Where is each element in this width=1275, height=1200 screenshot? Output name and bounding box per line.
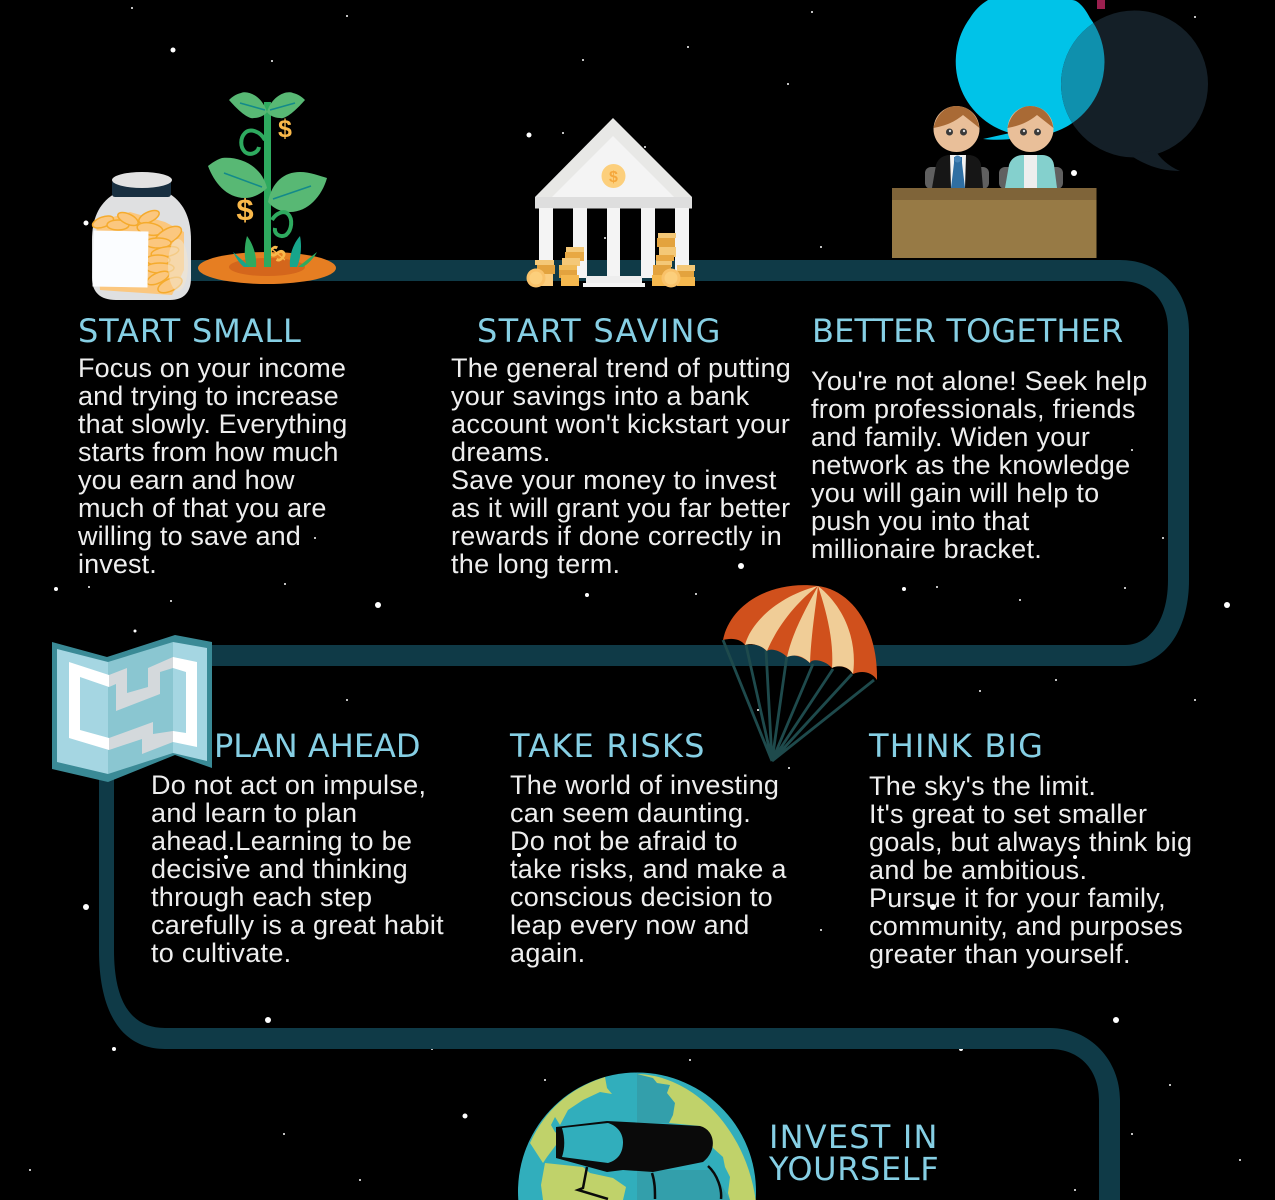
text: think big: It's great to set smaller bbox=[869, 799, 1147, 829]
heading: start small: START SMALL bbox=[78, 312, 302, 350]
heading: take risks: TAKE RISKS bbox=[510, 727, 706, 765]
text: start small: that slowly. Everything bbox=[78, 409, 347, 439]
text: think big: and be ambitious. bbox=[869, 855, 1087, 885]
heading: invest in yourself: INVEST IN bbox=[769, 1118, 939, 1156]
text: plan ahead: and learn to plan bbox=[151, 798, 357, 828]
icon: money plant: $ bbox=[236, 192, 254, 227]
text: start saving: rewards if done correctly in bbox=[451, 521, 782, 551]
text: better together: and family. Widen your bbox=[811, 422, 1090, 452]
icon: money plant: $ bbox=[263, 240, 293, 268]
heading: better together: BETTER TOGETHER bbox=[812, 312, 1123, 350]
text: plan ahead bbox=[151, 770, 444, 968]
icon: speech bubbles bbox=[956, 0, 1208, 171]
text: take risks: conscious decision to bbox=[510, 882, 773, 912]
text: take risks: leap every now and bbox=[510, 910, 750, 940]
heading: start saving: START SAVING bbox=[477, 312, 722, 350]
text: start small: invest. bbox=[78, 549, 157, 579]
text: start saving: The general trend of putting bbox=[451, 353, 791, 383]
text: take risks: again. bbox=[510, 938, 585, 968]
text: better together: from professionals, friends bbox=[811, 394, 1136, 424]
text: start saving: Save your money to invest bbox=[451, 465, 777, 495]
text: plan ahead: carefully is a great habit bbox=[151, 910, 444, 940]
text: plan ahead: to cultivate. bbox=[151, 938, 291, 968]
text: better together: push you into that bbox=[811, 506, 1030, 536]
text: start small bbox=[78, 353, 347, 579]
text: take risks: take risks, and make a bbox=[510, 854, 787, 884]
text: take risks: Do not be afraid to bbox=[510, 826, 738, 856]
heading: think big: THINK BIG bbox=[869, 727, 1044, 765]
text: start small: much of that you are bbox=[78, 493, 327, 523]
text: think big: community, and purposes bbox=[869, 911, 1183, 941]
icon: bank: $ bbox=[609, 169, 618, 186]
text: take risks: The world of investing bbox=[510, 770, 779, 800]
text: start saving: your savings into a bank bbox=[451, 381, 749, 411]
text: start saving: dreams. bbox=[451, 437, 551, 467]
text: start small: starts from how much bbox=[78, 437, 338, 467]
text: start small: willing to save and bbox=[78, 521, 301, 551]
text: start small: Focus on your income bbox=[78, 353, 346, 383]
text: plan ahead: ahead.Learning to be bbox=[151, 826, 412, 856]
text: start small: and trying to increase bbox=[78, 381, 339, 411]
text: start small: you earn and how bbox=[78, 465, 295, 495]
text: start saving: the long term. bbox=[451, 549, 620, 579]
text: start saving: as it will grant you far better bbox=[451, 493, 790, 523]
text: better together: network as the knowledge bbox=[811, 450, 1130, 480]
text: plan ahead: Do not act on impulse, bbox=[151, 770, 426, 800]
text: better together: you will gain will help to bbox=[811, 478, 1099, 508]
text: think big: greater than yourself. bbox=[869, 939, 1131, 969]
text: plan ahead: decisive and thinking bbox=[151, 854, 408, 884]
text: start saving bbox=[451, 353, 791, 579]
text: better together: You're not alone! Seek help bbox=[811, 366, 1148, 396]
text: think big: goals, but always think big bbox=[869, 827, 1192, 857]
text: think big bbox=[869, 771, 1192, 969]
heading: plan ahead: PLAN AHEAD bbox=[214, 727, 421, 765]
text: think big: The sky's the limit. bbox=[869, 771, 1096, 801]
text: better together bbox=[811, 366, 1148, 564]
text: plan ahead: through each step bbox=[151, 882, 372, 912]
text: take risks: can seem daunting. bbox=[510, 798, 751, 828]
text: start saving: account won't kickstart your bbox=[451, 409, 790, 439]
text: take risks bbox=[510, 770, 787, 968]
text: better together: millionaire bracket. bbox=[811, 534, 1042, 564]
heading: invest in yourself: YOURSELF bbox=[769, 1150, 939, 1188]
text: think big: Pursue it for your family, bbox=[869, 883, 1166, 913]
icon: money plant: $ bbox=[278, 115, 292, 143]
heading: invest in yourself bbox=[769, 1118, 939, 1188]
